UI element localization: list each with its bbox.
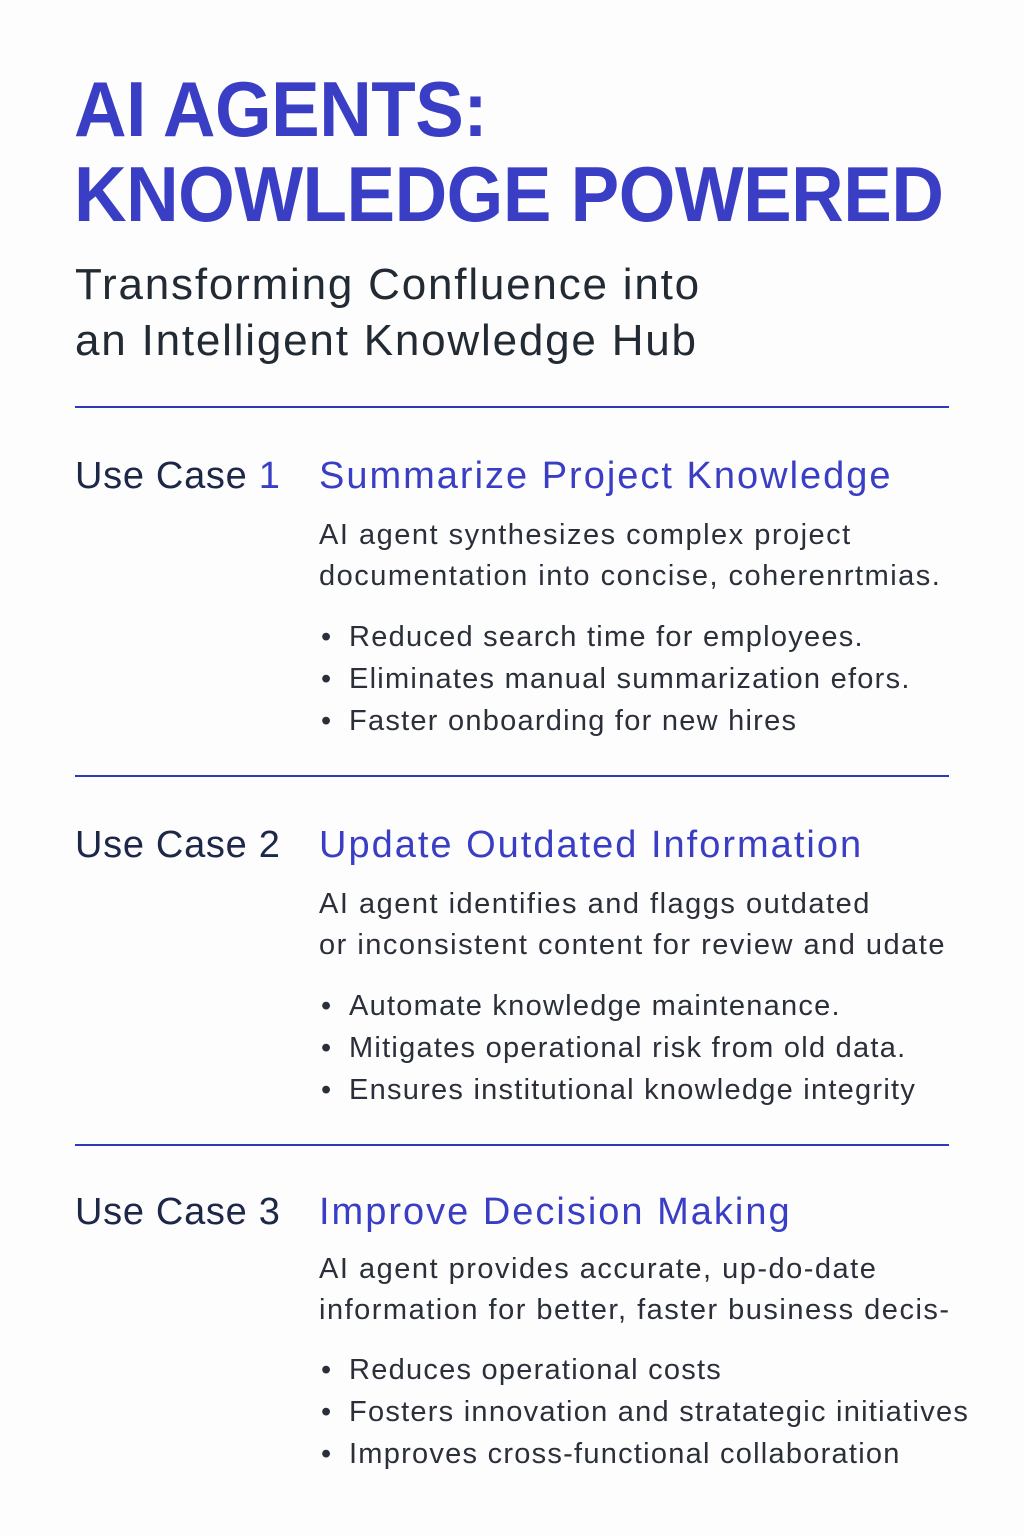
heading: summarize: Summarize Project Knowledge: [319, 455, 893, 497]
panel: use case 3: [75, 1191, 969, 1470]
description 2: AI agent identifies and flaggs outdated: [319, 888, 871, 920]
description 2: [319, 888, 946, 961]
bullets 3: [322, 1354, 969, 1470]
subtitle: [75, 260, 701, 365]
panel: use case 2: [75, 824, 946, 1106]
bullets 1: Reduced search time for employees.: [349, 621, 864, 653]
bullets 2: Automate knowledge maintenance.: [349, 990, 841, 1022]
description 1: documentation into concise, coherenrtmias.: [319, 560, 941, 592]
subtitle: Transforming Confluence into: [75, 260, 701, 309]
bullets 3: Fosters innovation and stratategic initiatives: [349, 1396, 969, 1428]
label: use case 3: Use Case 3: [75, 1191, 281, 1233]
description 3: AI agent provides accurate, up-do-date: [319, 1253, 877, 1285]
bullets 2: [322, 990, 916, 1106]
bullets 2: Mitigates operational risk from old data.: [349, 1032, 906, 1064]
heading: decision: Improve Decision Making: [319, 1191, 792, 1233]
bullets 3: Reduces operational costs: [349, 1354, 722, 1386]
panel: use case 1: [75, 455, 941, 737]
description 2: or inconsistent content for review and udate: [319, 929, 946, 961]
subtitle: an Intelligent Knowledge Hub: [75, 316, 698, 365]
title: [74, 65, 943, 238]
bullets 1: Faster onboarding for new hires: [349, 705, 797, 737]
label: use case 2: Use Case 2: [75, 824, 281, 866]
title: KNOWLEDGE POWERED: [74, 150, 943, 238]
bullets 1: [322, 621, 911, 737]
bullets 3: Improves cross-functional collaboration: [349, 1438, 901, 1470]
label: use case 1: Use Case 1: [75, 455, 281, 497]
heading: update: Update Outdated Information: [319, 824, 863, 866]
title: AI AGENTS:: [74, 65, 487, 153]
bullets 1: Eliminates manual summarization efors.: [349, 663, 911, 695]
description 3: information for better, faster business decis-: [319, 1294, 951, 1326]
description 1: [319, 519, 941, 592]
description 1: AI agent synthesizes complex project: [319, 519, 852, 551]
bullets 2: Ensures institutional knowledge integrity: [349, 1074, 916, 1106]
description 3: [319, 1253, 951, 1326]
